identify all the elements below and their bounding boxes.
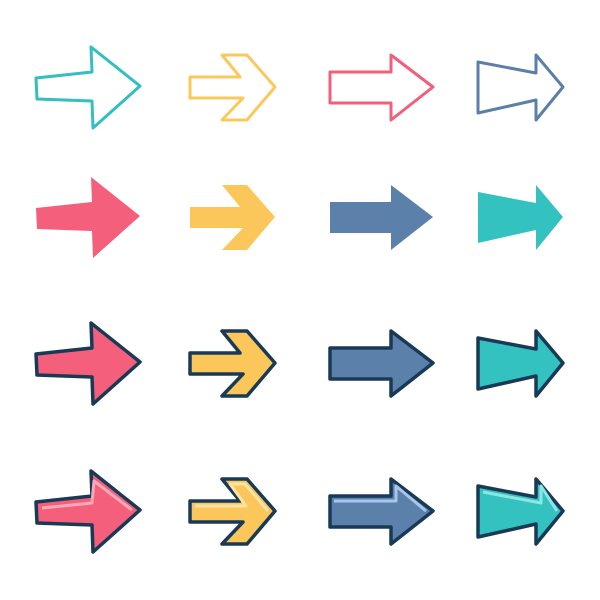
icon: teal outlined arrow [478,331,563,396]
row 1: outline arrows [36,47,563,128]
row 3: outlined filled arrows [36,323,563,404]
icon: blue outlined arrow [330,331,433,396]
icon: teal filled arrow [478,185,563,250]
icon: blue outline arrow [478,55,563,120]
icon: pink outlined arrow [36,323,140,404]
icon: yellow filled arrow [190,185,275,250]
row 2: flat filled arrows [36,177,563,258]
icon: blue filled arrow [330,185,433,250]
icon: blue glossy arrow [330,479,433,544]
icon: yellow outline arrow [190,55,275,120]
row 4: glossy arrows [36,471,563,552]
icon: pink outline arrow [330,55,433,120]
icon: teal glossy arrow [478,479,563,544]
icon: pink glossy arrow [36,471,140,552]
icon: teal outline arrow [36,47,140,128]
icon: yellow outlined arrow [190,331,275,396]
icon: pink filled arrow [36,177,140,258]
icon: yellow glossy arrow [190,479,275,544]
